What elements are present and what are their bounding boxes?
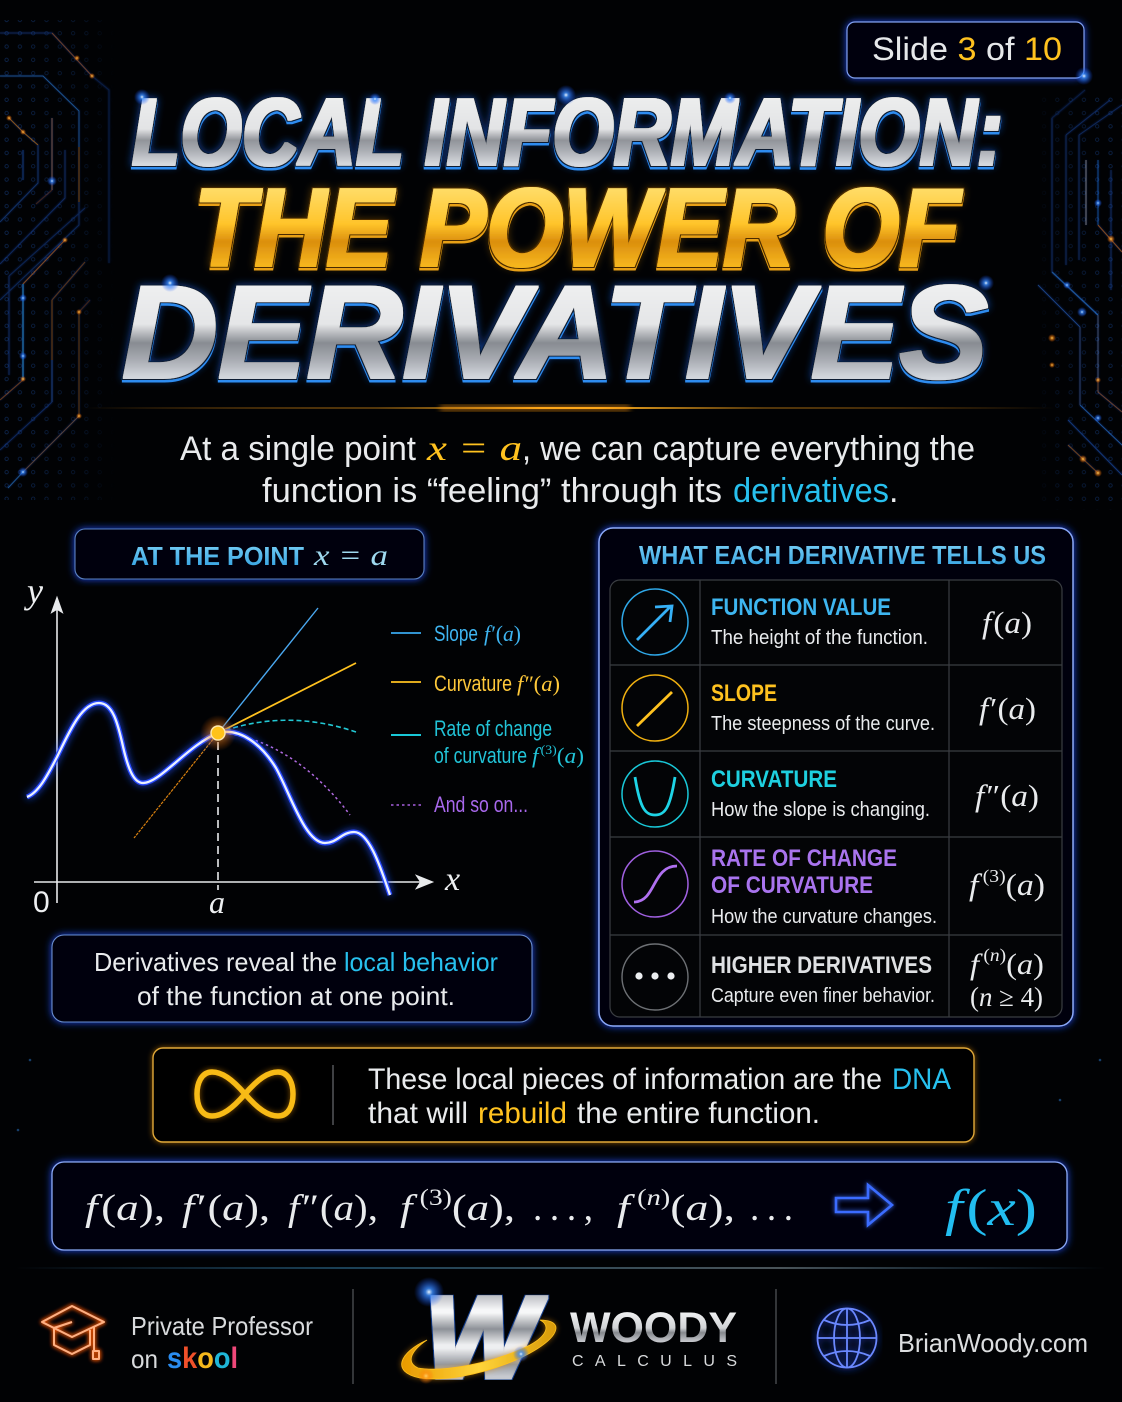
callout text: that will — [368, 1097, 468, 1130]
row: higher derivatives: HIGHER DERIVATIVES — [711, 952, 932, 979]
derivative sequence: f″(a), — [288, 1188, 378, 1229]
derivative sequence: (3) — [420, 1185, 452, 1210]
callout text: rebuild — [478, 1097, 567, 1130]
row: higher derivatives: (n ≥ 4) — [970, 982, 1043, 1012]
left header: at the point: AT THE POINT — [131, 541, 304, 571]
icon: globe — [818, 1308, 876, 1368]
subtitle — [180, 428, 975, 510]
row: rate of change of curvature: ( — [1006, 867, 1017, 902]
tangent lines — [134, 608, 356, 838]
legend: rate of change of curvature: (3) — [541, 742, 557, 757]
panel: what each derivative tells us — [599, 528, 1073, 1026]
row: higher derivatives: a) — [1017, 948, 1043, 981]
callout: dna — [153, 1048, 974, 1142]
row: higher derivatives: ( — [983, 945, 990, 966]
derivative sequence: a), — [685, 1188, 730, 1229]
row: slope: SLOPE — [711, 680, 777, 707]
legend: rate of change of curvature: Rate of change — [434, 716, 552, 741]
callout text: These local pieces of information are the — [368, 1063, 882, 1096]
derivative sequence: f(a), — [85, 1188, 165, 1229]
derivative sequence: f — [400, 1188, 410, 1229]
legend: and so on — [391, 792, 528, 817]
footer: website: BrianWoody.com — [898, 1328, 1088, 1358]
legend: rate of change of curvature: ( — [557, 743, 565, 768]
footer: woody calculus logo: CALCULUS — [572, 1353, 737, 1370]
derivative sequence: . . . , — [533, 1188, 593, 1229]
derivative sequence: ( — [452, 1188, 467, 1229]
left header: at the point: x = a — [313, 539, 388, 572]
row: higher derivatives — [622, 944, 1044, 1012]
row: function value — [622, 589, 1032, 655]
callout text: the entire function. — [577, 1097, 820, 1130]
slide badge — [847, 22, 1093, 85]
axes — [34, 598, 432, 903]
icon: dots — [622, 944, 688, 1010]
subtitle: derivatives — [733, 472, 889, 510]
derivative sequence: n) — [647, 1185, 668, 1210]
panel heading: WHAT EACH DERIVATIVE TELLS US — [639, 540, 1046, 570]
subtitle: x = a — [426, 428, 522, 468]
callout text — [368, 1063, 951, 1130]
axis labels: a — [209, 884, 225, 920]
footer: private professor: Private Professor — [131, 1311, 313, 1341]
icon: arrow — [622, 589, 688, 655]
legend: curvature: f″(a) — [517, 671, 560, 696]
callout text: DNA — [892, 1063, 951, 1096]
derivative sequence — [85, 1185, 793, 1229]
note: local behavior: local behavior — [344, 947, 498, 977]
note: local behavior: Derivatives reveal the — [94, 947, 337, 977]
left header: at the point — [75, 529, 424, 579]
axis labels — [24, 571, 460, 920]
subtitle: function is “feeling” through its — [262, 472, 722, 510]
footer: website — [818, 1308, 1088, 1368]
graph — [24, 571, 460, 920]
footer: private professor: on — [131, 1344, 158, 1374]
icon: infinity — [197, 1072, 293, 1116]
icon: parabola — [622, 761, 688, 827]
note: local behavior: of the function at one point. — [137, 981, 455, 1011]
row: function value: f(a) — [982, 605, 1032, 640]
legend: and so on: And so on... — [434, 792, 528, 817]
legend: slope — [391, 621, 521, 646]
subtitle: At a single point — [180, 430, 417, 468]
derivative sequence: a), — [467, 1188, 511, 1229]
legend: slope: Slope — [434, 621, 478, 646]
logo mark: W — [425, 1272, 546, 1402]
row: slope: f′(a) — [979, 691, 1036, 726]
row: slope: The steepness of the curve. — [711, 713, 935, 735]
point at x = a — [200, 715, 236, 751]
footer: woody calculus logo: WOODY — [570, 1304, 737, 1352]
result f(x): f(x) — [945, 1180, 1037, 1237]
row: rate of change of curvature: (3) — [983, 866, 1006, 887]
skool wordmark: skool — [167, 1342, 238, 1375]
row: function value: FUNCTION VALUE — [711, 594, 891, 621]
subtitle: , we can capture everything the — [522, 430, 975, 468]
title line: derivatives: DERIVATIVES — [122, 259, 988, 407]
row: rate of change of curvature: How the curvature changes. — [711, 906, 937, 928]
row: rate of change of curvature: OF CURVATURE — [711, 872, 873, 899]
row: higher derivatives: n) — [990, 945, 1006, 965]
row: curvature — [622, 761, 1039, 827]
row: curvature: How the slope is changing. — [711, 799, 930, 821]
row: rate of change of curvature — [622, 845, 1045, 928]
arrow — [836, 1185, 892, 1225]
legend: curvature — [391, 671, 560, 696]
slide badge: Slide 3 of 10 — [872, 31, 1062, 67]
icon: graduation cap — [42, 1306, 104, 1359]
legend: rate of change of curvature: of curvature — [434, 743, 527, 768]
row: rate of change of curvature: f — [969, 867, 978, 902]
footer: private professor — [42, 1306, 313, 1375]
derivative sequence: ( — [637, 1185, 647, 1210]
legend: rate of change of curvature — [391, 716, 584, 768]
formula bar — [52, 1162, 1067, 1250]
derivative sequence: f′(a), — [182, 1188, 270, 1229]
derivative sequence: ( — [670, 1188, 685, 1229]
row: function value: The height of the function. — [711, 627, 928, 649]
derivative sequence: . . . — [750, 1188, 793, 1229]
subtitle: . — [889, 472, 898, 510]
derivative sequence: f — [617, 1188, 627, 1229]
row: curvature: CURVATURE — [711, 766, 837, 793]
row: curvature: f″(a) — [975, 778, 1039, 813]
icon: s-curve — [622, 851, 688, 917]
row: rate of change of curvature: a) — [1017, 867, 1044, 902]
title line: the power of: THE POWER OF — [194, 166, 963, 290]
axis labels: x — [444, 861, 460, 898]
row: higher derivatives: f — [970, 948, 978, 981]
row: higher derivatives: Capture even finer behavior. — [711, 985, 935, 1007]
axis labels: y — [24, 571, 43, 611]
axis labels: 0 — [33, 886, 50, 919]
row: higher derivatives: ( — [1006, 948, 1017, 981]
legend: rate of change of curvature: f — [532, 743, 538, 768]
legend: curvature: Curvature — [434, 671, 512, 696]
icon: line — [622, 675, 688, 741]
legend — [391, 621, 584, 817]
function curve — [27, 703, 390, 895]
row: slope — [622, 675, 1036, 741]
footer: woody calculus logo — [402, 1272, 737, 1402]
legend: slope: f′(a) — [484, 621, 521, 646]
row: rate of change of curvature: RATE OF CHANGE — [711, 845, 897, 872]
title — [122, 79, 1003, 407]
legend: rate of change of curvature: a) — [565, 743, 584, 768]
note: local behavior — [52, 935, 532, 1022]
